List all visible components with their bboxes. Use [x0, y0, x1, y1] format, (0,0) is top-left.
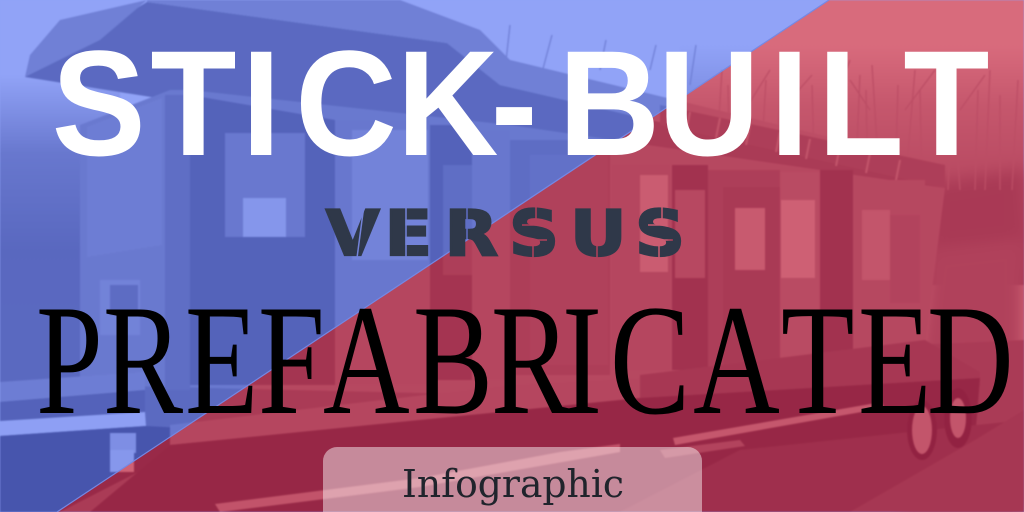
- title: stick-built: STICK-BUILT: [52, 19, 989, 187]
- label pill: infographic: Infographic: [402, 462, 624, 506]
- title: prefabricated: PREFABRICATED: [36, 273, 1014, 448]
- label pill: infographic: [323, 447, 702, 512]
- diagonal divide between blue and red: [57, 0, 829, 512]
- photo background: blue tinted side: [0, 0, 726, 512]
- subtitle: versus: VERSUS: [326, 198, 685, 270]
